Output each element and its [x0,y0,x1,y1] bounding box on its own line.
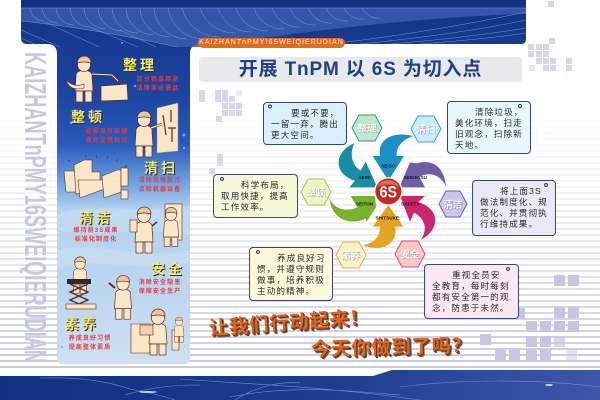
text: 清洁 description: 维持前3S成果 [73,228,119,234]
bottom blue band [0,370,600,400]
callout: 重视全员安全: 都有安全第一的观 [432,292,510,302]
hexagon: 清洁 [439,191,467,217]
hexagon: 安全: 安全 [400,249,420,261]
background stripes [0,163,600,368]
text: 安全 description: 消除安全隐患 [139,280,181,286]
callout: 要或不要 [263,102,347,145]
text: 清洁 description [73,226,119,243]
text: 安全 description [138,278,181,295]
cartoon figures [64,56,184,356]
heading: 清洁: 清洁 [79,210,113,226]
title [199,57,522,82]
callout: 清除垃圾 [447,101,531,154]
callout: 养成良好习惯: 做事，培养积极 [257,275,325,285]
callout: 养成良好习惯: 惯，井遵守规则 [257,264,325,274]
slogan: 今天你做到了吗: 今天你做到了吗？ [311,335,472,361]
text: 整理 description: 清理非必需品 [137,86,179,92]
hexagon: 素养 [336,242,366,268]
callout: 科学布局: 科学布局， [241,180,289,190]
text: 整顿 description: 做好定量标识 [86,138,128,144]
text: 素养 description [68,334,111,351]
text: 素养 description: 养成良好习惯 [69,336,111,342]
hexagon: 整顿 [301,179,331,205]
hexagon: 整顿: 整顿 [307,188,326,200]
hexagon: 素养: 素养 [341,250,361,262]
figure: safety worker [109,275,132,319]
hexagon: 整理: 整理 [357,123,377,135]
text: 整理 description: 区分物品用途 [137,77,179,83]
arrow: SEIRI [339,143,377,187]
figure: carrying worker [131,309,184,355]
callout: 要或不要: 一留一弃，腾出 [271,119,339,129]
callout: 将上面3S: 行维持成果。 [480,219,538,229]
arrow: SEIRI: SEIRI [359,175,371,180]
text: 整顿 description: 必需品分区放 [86,129,128,135]
text: 清扫 description [139,176,181,193]
callout: 重视全员安全 [424,264,519,319]
arrow: SHITSUKE [363,205,403,248]
hexagon nodes [300,114,468,268]
hexagon: 整理 [352,115,382,141]
arrow: SEIKETSU: SEIKETSU [404,175,428,180]
arrow: SAFETY: SAFETY [401,202,420,207]
heading: 清扫: 清扫 [144,160,178,176]
figure: two cleaning workers [130,204,182,253]
arrow: SEISO: SEISO [381,164,396,169]
callout: 养成良好习惯: 养成良好习 [277,253,325,263]
title: 开展 TnPM 以 6S 为切入点 [239,59,482,80]
hexagon: 清扫: 清扫 [416,124,436,136]
center badge: 6S [374,177,403,206]
6S arrow wheel [329,134,446,248]
hexagon: 素养: 素养 [342,250,361,262]
top band and left panel [21,0,526,364]
hexagon: 清洁: 清洁 [444,200,463,212]
callout: 清除垃圾: 天地。 [455,140,484,150]
arrow: SHITSUKE: SHITSUKE [376,215,399,220]
heading: 安全: 安全 [151,261,185,277]
arrow: SEITON [329,196,376,222]
center badge: 6S: 6S [380,183,397,202]
hexagon: 安全: 安全 [401,250,420,262]
orange tag [198,38,345,48]
heading: 素养: 素养 [65,316,99,332]
text: 清扫 description: 清除现场脏污 [139,178,181,184]
callout: 养成良好习惯 [249,247,333,301]
callout: 将上面3S: 将上面3S [500,186,542,196]
slogan: 让我们行动起来: 让我们行动起来！ [208,307,370,340]
callout: 重视全员安全: 全教育，每时每刻 [432,281,510,291]
callout: 将上面3S [472,180,556,236]
callout: 要或不要: 要或不要， [291,108,339,118]
text: 清扫 description: 点检机器设备 [139,187,181,193]
heading: 整理: 整理 [123,57,157,73]
text: 清洁 description: 标准化制度化 [75,237,117,243]
callout: 科学布局: 工作效率。 [221,202,269,212]
hexagon: 整理: 整理 [358,124,377,136]
figure: machines [64,155,128,199]
callout: 清除垃圾: 清除垃圾， [475,107,523,117]
callout: 要或不要: 更大空间。 [271,130,319,140]
orange tag: KAIZHANTnPMYI6SWEIQIERUDIAN [199,39,344,46]
callout: 重视全员安全: 重视全员安 [452,270,500,280]
figure: board worker [135,103,178,157]
hexagon: 整顿: 整顿 [306,187,326,199]
figure: lift worker [66,257,96,309]
figure: sorting worker [66,56,128,102]
arrow: SEIKETSU [399,162,446,187]
text: 整理 description [137,75,179,92]
text: 安全 description: 保障安全生产 [139,289,181,295]
arrow: SEITON: SEITON [356,202,374,207]
hexagon: 清扫 [411,116,441,142]
callout: 清除垃圾: 旧观念，扫除新 [455,129,523,139]
heading: 整顿: 整顿 [71,109,105,125]
callout: 将上面3S: 范化、并贯彻执 [480,208,548,218]
callout: 科学布局 [213,174,298,218]
hexagon: 清洁: 清洁 [443,199,463,211]
arrow: SEISO [373,134,413,181]
callout: 重视全员安全: 念，防患于未然。 [432,303,510,313]
callout: 清除垃圾: 美化环境，扫走 [455,118,523,128]
arrow: SAFETY [400,196,435,240]
callout: 养成良好习惯: 主动的精神。 [257,286,315,296]
hexagon: 清扫: 清扫 [417,124,436,136]
text: 素养 description: 提高整体素质 [69,345,111,351]
hexagon: 安全 [395,241,425,267]
text: 整顿 description [86,128,128,144]
callout: 将上面3S: 做法制度化、规 [480,197,548,207]
callout: 科学布局: 取用快捷，提高 [221,191,289,201]
